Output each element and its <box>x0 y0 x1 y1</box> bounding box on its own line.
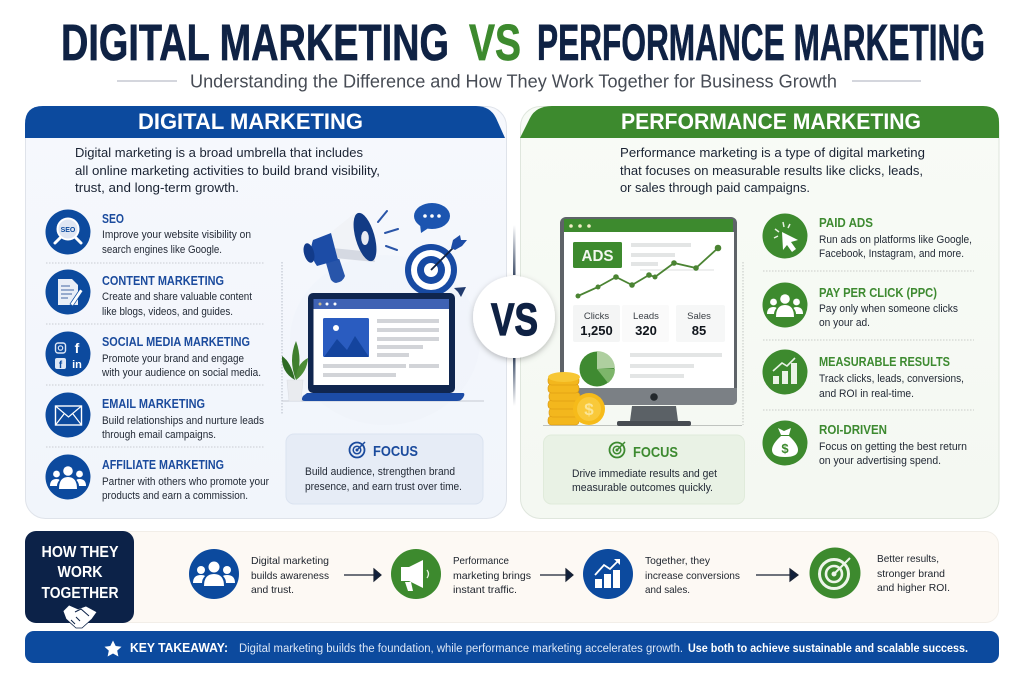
icon: target <box>810 548 860 598</box>
item: roi-driven: on your advertising spend. <box>819 455 941 467</box>
icon: SEO magnifier: SEO <box>61 227 76 234</box>
item: social media marketing: Promote your brand and engage <box>102 353 244 365</box>
item: email marketing: EMAIL MARKETING <box>102 396 205 411</box>
step 3 <box>583 549 740 599</box>
item: social media marketing: SOCIAL MEDIA MARKETING <box>102 334 250 349</box>
intro text: performance marketing <box>620 145 925 195</box>
intro text: performance marketing: that focuses on measurable results like clicks, leads, <box>620 163 923 178</box>
item: measurable results: Track clicks, leads, conversions, <box>819 373 964 385</box>
icon: focus target <box>610 442 625 458</box>
subtitle: Understanding the Difference and How They Work Together for Business Growth <box>190 72 837 92</box>
intro text: performance marketing: Performance marketing is a type of digital marketing <box>620 145 925 160</box>
title <box>61 14 985 71</box>
item: content marketing: Create and share valuable content <box>102 291 252 303</box>
badge: how they work together: TOGETHER <box>42 585 118 602</box>
icon: signal rays <box>378 211 398 250</box>
VS badge <box>473 225 555 406</box>
stat cards: 85 <box>692 323 706 338</box>
icon: money bag <box>762 420 808 466</box>
icon: megaphone <box>302 210 381 283</box>
monitor <box>560 217 737 426</box>
focus box: digital marketing <box>286 434 483 504</box>
item: affiliate marketing: products and earn a commission. <box>102 490 248 502</box>
item: paid ads: Facebook, Instagram, and more. <box>819 248 964 260</box>
icon: social networks <box>46 332 90 376</box>
icon: SEO magnifier <box>46 210 90 254</box>
item: roi-driven: Focus on getting the best return <box>819 441 967 453</box>
stat cards <box>573 305 725 342</box>
item: pay per click: PAY PER CLICK (PPC) <box>819 285 937 300</box>
arrow 3 <box>756 569 798 581</box>
item: SEO <box>46 210 251 256</box>
item: SEO: Improve your website visibility on <box>102 229 251 241</box>
badge: how they work together <box>25 531 134 628</box>
icon: target with arrow <box>405 235 467 297</box>
panel header: performance marketing <box>520 106 999 138</box>
item: pay per click: on your ad. <box>819 317 870 329</box>
item: social media marketing <box>46 332 261 379</box>
step 4: and higher ROI. <box>877 582 950 594</box>
icon: document and pen <box>46 270 90 314</box>
icon: growth chart <box>583 549 633 599</box>
item: affiliate marketing <box>46 454 269 502</box>
focus box: performance marketing: measurable outcomes quickly. <box>572 482 713 494</box>
item: paid ads: PAID ADS <box>819 215 873 230</box>
step 4: stronger brand <box>877 568 945 580</box>
focus box: digital marketing: presence, and earn trust over time. <box>305 481 462 493</box>
icon: plant <box>282 341 308 401</box>
intro text: performance marketing: or sales through paid campaigns. <box>620 180 810 195</box>
line chart <box>576 245 721 298</box>
item: affiliate marketing: AFFILIATE MARKETING <box>102 457 224 472</box>
panel header: digital marketing <box>25 106 505 138</box>
icon: star <box>104 640 122 656</box>
intro text: digital marketing <box>75 145 380 195</box>
laptop <box>302 293 464 401</box>
icon: people group <box>46 454 90 500</box>
item: SEO: search engines like Google. <box>102 244 222 256</box>
icon: click cursor <box>762 214 808 258</box>
pie chart <box>580 351 615 386</box>
icon: envelope <box>46 392 90 438</box>
illustration: monitor dashboard with coins <box>543 217 743 426</box>
arrow 1 <box>344 569 381 581</box>
item: content marketing: like blogs, videos, and guides. <box>102 306 233 318</box>
item: roi-driven: ROI-DRIVEN <box>819 422 887 437</box>
step 2: instant traffic. <box>453 584 517 596</box>
stat cards: 1,250 <box>580 323 613 338</box>
step 3: and sales. <box>645 584 690 596</box>
intro text: digital marketing: Digital marketing is a broad umbrella that includes <box>75 145 363 160</box>
focus box: performance marketing <box>544 435 744 504</box>
item: roi-driven <box>762 420 967 467</box>
icon: megaphone <box>391 549 441 599</box>
step 1: builds awareness <box>251 570 329 582</box>
ADS badge: ADS <box>582 248 614 265</box>
panel: digital marketing <box>25 106 506 518</box>
key takeaway bar <box>25 631 999 663</box>
icon: stacked coins: $ <box>584 400 594 419</box>
focus box: digital marketing: Build audience, strengthen brand <box>305 466 455 478</box>
step 3: increase conversions <box>645 570 740 582</box>
intro text: digital marketing: all online marketing activities to build brand visibility, <box>75 163 380 178</box>
focus box: performance marketing: Drive immediate results and get <box>572 468 717 480</box>
item: measurable results: MEASURABLE RESULTS <box>819 354 950 369</box>
icon: people group <box>189 549 239 599</box>
focus box: performance marketing: FOCUS <box>633 444 678 461</box>
key takeaway bar: Digital marketing builds the foundation, while performance marketing accelerates growth. <box>239 643 683 655</box>
icon: stacked coins <box>548 372 605 425</box>
item: measurable results: and ROI in real-time. <box>819 388 914 400</box>
focus box: digital marketing: FOCUS <box>373 443 418 460</box>
icon: social networks: f <box>59 360 63 371</box>
illustration: laptop with megaphone and target <box>282 203 484 425</box>
key takeaway bar: Use both to achieve sustainable and scalable success. <box>688 643 968 655</box>
icon: money bag: $ <box>781 441 789 456</box>
icon: handshake <box>63 605 97 628</box>
item: paid ads: Run ads on platforms like Google, <box>819 234 972 246</box>
step 1 <box>189 549 329 599</box>
item: content marketing <box>46 270 252 318</box>
item: social media marketing: with your audience on social media. <box>101 367 261 379</box>
step 2: Performance <box>453 555 509 567</box>
item: pay per click <box>762 282 959 329</box>
ADS badge <box>573 242 622 268</box>
icon: focus target <box>350 442 365 458</box>
panel: performance marketing <box>520 106 999 518</box>
VS badge: VS <box>491 294 538 345</box>
panel header: digital marketing: DIGITAL MARKETING <box>138 109 363 134</box>
step 4 <box>810 548 950 598</box>
key takeaway bar: KEY TAKEAWAY: <box>130 640 228 655</box>
icon: speech bubble <box>414 203 450 233</box>
arrow 2 <box>540 569 573 581</box>
icon: people group <box>762 282 808 328</box>
stat cards: Clicks <box>584 311 609 322</box>
item: content marketing: CONTENT MARKETING <box>102 273 224 288</box>
item: email marketing: through email campaigns. <box>102 429 216 441</box>
item: affiliate marketing: Partner with others who promote your <box>102 476 269 488</box>
stat cards: Leads <box>633 311 659 322</box>
badge: how they work together: HOW THEY <box>42 544 119 561</box>
item: paid ads <box>762 214 972 260</box>
stat cards: 320 <box>635 323 657 338</box>
title: VS <box>469 14 521 71</box>
icon: growth bars <box>762 350 808 394</box>
icon: social networks: in <box>72 359 82 371</box>
panel header: performance marketing: PERFORMANCE MARKETING <box>621 109 921 134</box>
stat cards: Sales <box>687 311 711 322</box>
step 2: marketing brings <box>453 570 531 582</box>
step 1: Digital marketing <box>251 555 329 567</box>
intro text: digital marketing: trust, and long-term growth. <box>75 180 239 195</box>
step 1: and trust. <box>251 584 294 596</box>
item: SEO: SEO <box>102 211 124 226</box>
step 3: Together, they <box>645 555 711 567</box>
title: DIGITAL MARKETING <box>61 14 449 71</box>
item: pay per click: Pay only when someone clicks <box>819 303 959 315</box>
icon: social networks: f <box>75 340 80 356</box>
how they work together band <box>25 531 998 628</box>
badge: how they work together: WORK <box>58 564 103 581</box>
step 2 <box>391 549 531 599</box>
item: email marketing <box>46 392 265 441</box>
step 4: Better results, <box>877 553 939 565</box>
item: email marketing: Build relationships and nurture leads <box>102 415 265 427</box>
item: measurable results <box>762 350 964 400</box>
